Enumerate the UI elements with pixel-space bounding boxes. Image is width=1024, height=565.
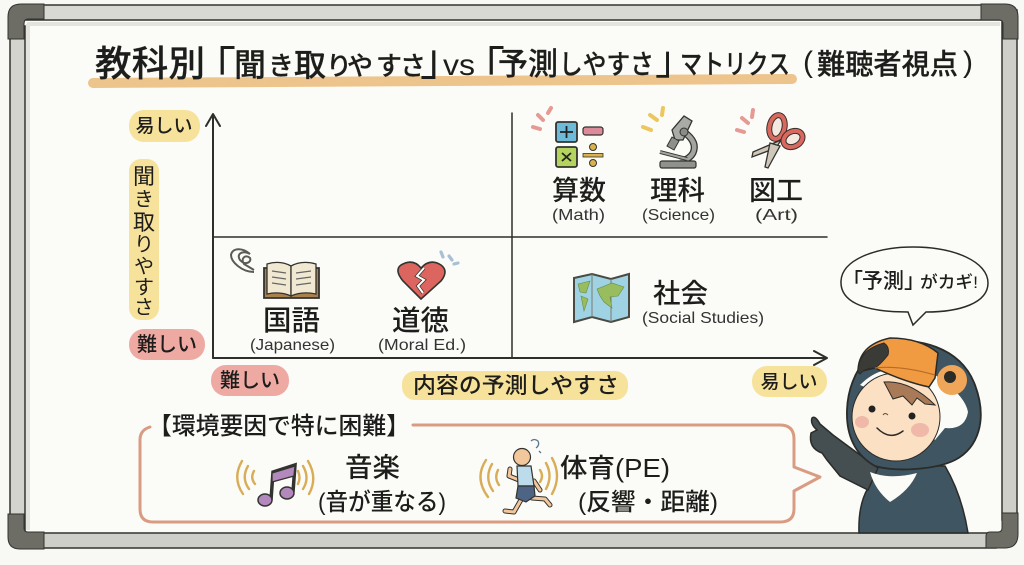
subject: japanese: (Japanese) bbox=[250, 337, 335, 354]
subject: physical education: (反響・距離) bbox=[578, 489, 718, 516]
speech bubble: 「 bbox=[842, 270, 863, 293]
subject: moral education bbox=[378, 252, 466, 354]
icon: math operators bbox=[533, 108, 603, 167]
speech bubble bbox=[841, 247, 988, 325]
subject: social studies bbox=[574, 274, 764, 327]
title with highlighter underline: 予測 bbox=[498, 47, 558, 82]
subject: math bbox=[533, 108, 606, 224]
title with highlighter underline: マトリクス bbox=[680, 50, 790, 80]
x axis label: hard bbox=[211, 365, 289, 396]
y axis title: 聞 bbox=[133, 164, 155, 189]
subject: music: (音が重なる) bbox=[318, 489, 446, 516]
icon: world map bbox=[574, 274, 629, 322]
y axis title: き bbox=[134, 189, 154, 211]
x axis label: easy: 易しい bbox=[760, 372, 818, 393]
speech bubble: 予測 bbox=[862, 270, 904, 293]
hood bbox=[847, 341, 981, 469]
y axis title: す bbox=[134, 277, 154, 299]
subject: art bbox=[737, 110, 805, 224]
y axis title: さ bbox=[134, 297, 154, 319]
icon: broken heart bbox=[398, 252, 458, 299]
beak bbox=[858, 338, 938, 387]
subject: science: 理科 bbox=[650, 176, 705, 206]
panel heading: 【環境要因で特に困難】 bbox=[148, 413, 410, 440]
title with highlighter underline: 」 bbox=[420, 36, 464, 85]
y axis label: hard: 難しい bbox=[137, 333, 197, 356]
icon: music note with sound waves bbox=[237, 461, 313, 506]
title with highlighter underline: 聞 bbox=[234, 47, 266, 83]
title with highlighter underline: 教科別 bbox=[95, 43, 205, 84]
title with highlighter underline: ( bbox=[803, 46, 813, 79]
subject: physical education: 体育(PE) bbox=[560, 453, 670, 483]
icon: scissors bbox=[737, 110, 805, 168]
title with highlighter underline: す bbox=[376, 51, 402, 81]
subject: math: (Math) bbox=[552, 207, 605, 224]
subject: moral education: 道徳 bbox=[392, 305, 449, 336]
y axis label: hard bbox=[129, 329, 205, 360]
title with highlighter underline: 難聴者視点 bbox=[817, 49, 958, 81]
white cheek patch and eye bbox=[860, 365, 968, 440]
y axis title bbox=[129, 159, 159, 320]
title with highlighter underline: 取 bbox=[294, 47, 326, 83]
y axis title: り bbox=[134, 234, 154, 256]
title with highlighter underline: 「 bbox=[461, 44, 505, 93]
y axis label: easy bbox=[129, 110, 200, 142]
subject: japanese bbox=[231, 249, 335, 354]
title with highlighter underline: さ bbox=[400, 51, 426, 81]
speech bubble: がカギ! bbox=[920, 272, 978, 292]
x axis title: 内容の予測しやすさ bbox=[413, 373, 619, 398]
title with highlighter underline: しやすさ bbox=[559, 50, 654, 80]
subject: math: 算数 bbox=[552, 176, 606, 206]
panel: environmental factors bbox=[140, 413, 820, 522]
title with highlighter underline: 「 bbox=[192, 44, 236, 93]
x axis label: easy bbox=[752, 366, 827, 397]
subject: music bbox=[237, 453, 446, 516]
character: child in toucan costume bbox=[810, 338, 981, 533]
subject: science: (Science) bbox=[642, 207, 715, 224]
matrix axes and quadrant lines bbox=[206, 113, 827, 365]
title with highlighter underline: 」 bbox=[655, 39, 695, 83]
title with highlighter underline bbox=[93, 36, 973, 93]
icon: running child with sound waves bbox=[480, 440, 557, 512]
subject: art: (Art) bbox=[755, 207, 798, 224]
subject: physical education bbox=[480, 440, 718, 516]
y axis label: easy: 易しい bbox=[135, 116, 193, 137]
speech bubble: 」 bbox=[904, 270, 925, 293]
y axis title: や bbox=[134, 256, 154, 278]
pointing arm bbox=[810, 417, 878, 490]
icon: open book bbox=[264, 262, 319, 298]
title with highlighter underline: り bbox=[326, 51, 352, 81]
title with highlighter underline: き bbox=[268, 51, 294, 81]
x axis label: hard: 難しい bbox=[220, 369, 280, 392]
title with highlighter underline: ) bbox=[963, 46, 973, 79]
subject: moral education: (Moral Ed.) bbox=[378, 337, 466, 354]
subject: science bbox=[642, 108, 715, 224]
subject: music: 音楽 bbox=[345, 453, 400, 483]
subject: social studies: (Social Studies) bbox=[642, 310, 764, 327]
subject: art: 図工 bbox=[749, 176, 803, 206]
costume body bbox=[859, 466, 968, 533]
y axis title: 取 bbox=[133, 210, 155, 235]
title with highlighter underline: vs bbox=[443, 49, 475, 82]
icon: microscope bbox=[643, 108, 696, 168]
title with highlighter underline: や bbox=[347, 51, 373, 81]
face bbox=[852, 373, 940, 461]
subject: social studies: 社会 bbox=[653, 279, 708, 309]
white chest bbox=[870, 472, 917, 502]
icon: tangled scribble bbox=[231, 249, 254, 272]
subject: japanese: 国語 bbox=[263, 305, 320, 336]
